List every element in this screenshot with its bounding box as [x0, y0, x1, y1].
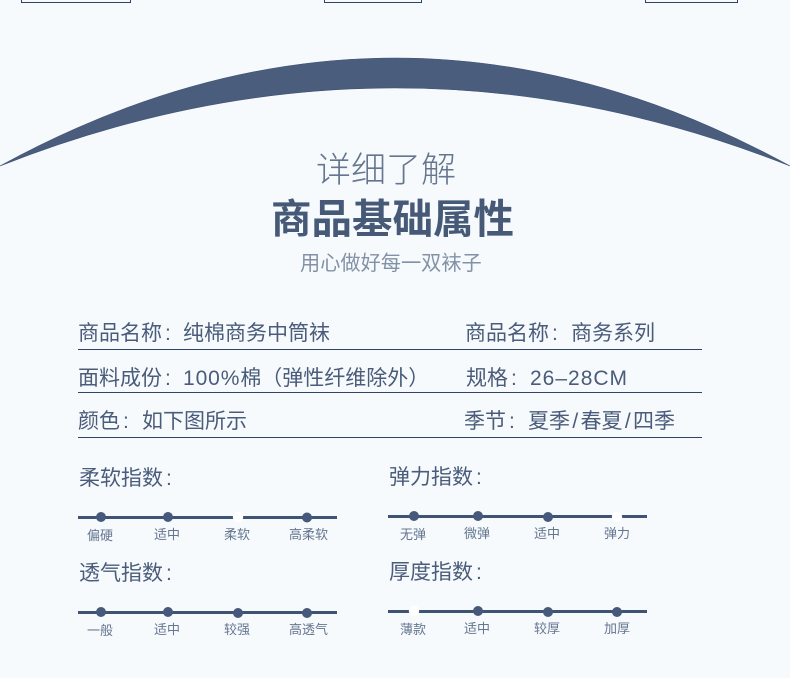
- row 1: 商品名称:: [78, 322, 171, 345]
- slider: softness: 高柔软: [289, 527, 328, 542]
- slider: softness: [78, 512, 337, 543]
- row 3: 季节:: [464, 410, 515, 433]
- slider: breathability: 适中: [154, 622, 180, 637]
- slider: breathability: [78, 607, 337, 638]
- slider: elasticity: 无弹: [400, 527, 426, 542]
- row 3: 夏季 春夏 四季: [528, 410, 675, 433]
- row 3: 颜色:: [78, 410, 129, 433]
- row 2: 100%棉（弹性纤维除外）: [183, 367, 429, 390]
- slider: softness: 柔软: [224, 527, 250, 542]
- row 2: 规格:: [466, 367, 517, 390]
- slider: elasticity: 微弹: [464, 526, 490, 541]
- slider: breathability: 较强: [224, 622, 250, 637]
- title: 商品基础属性: 商品基础属性: [271, 196, 514, 242]
- tagline: 用心做好每一双袜子: [300, 253, 482, 275]
- row 1: 商务系列: [571, 322, 655, 345]
- row 2: [78, 367, 628, 390]
- top image frame bottoms: [21, 0, 738, 3]
- slider: elasticity: [388, 511, 647, 542]
- slider: breathability: 高透气: [289, 622, 328, 637]
- row 1: [78, 322, 655, 345]
- decorative crescent arc: [0, 58, 790, 166]
- heading: softness index: 柔软指数:: [79, 467, 172, 490]
- row 3: /: [572, 410, 578, 433]
- heading: elasticity index: 弹力指数:: [389, 466, 482, 489]
- slider: breathability: 一般: [87, 623, 113, 638]
- subtitle: 详细了解: 详细了解: [316, 151, 456, 190]
- heading: thickness index: 厚度指数:: [389, 561, 482, 584]
- heading: breathability index: 透气指数:: [79, 562, 172, 585]
- row 3: 如下图所示: [142, 410, 247, 433]
- row 3: /: [625, 410, 631, 433]
- slider: thickness: 较厚: [534, 621, 560, 636]
- row 1: 商品名称:: [465, 322, 558, 345]
- slider: softness: 适中: [154, 527, 180, 542]
- slider: elasticity: 适中: [534, 526, 560, 541]
- row 2: 26–28CM: [530, 367, 628, 390]
- row 1: 纯棉商务中筒袜: [183, 322, 330, 345]
- row 2: 面料成份:: [78, 367, 171, 390]
- row 3: [78, 410, 675, 433]
- slider: thickness: [388, 606, 647, 637]
- attribute table: [78, 322, 702, 438]
- slider: softness: 偏硬: [87, 528, 113, 543]
- slider: elasticity: 弹力: [604, 526, 630, 541]
- slider: thickness: 薄款: [400, 622, 426, 637]
- section intro: [271, 151, 514, 275]
- slider: thickness: 加厚: [604, 621, 630, 636]
- slider: thickness: 适中: [464, 621, 490, 636]
